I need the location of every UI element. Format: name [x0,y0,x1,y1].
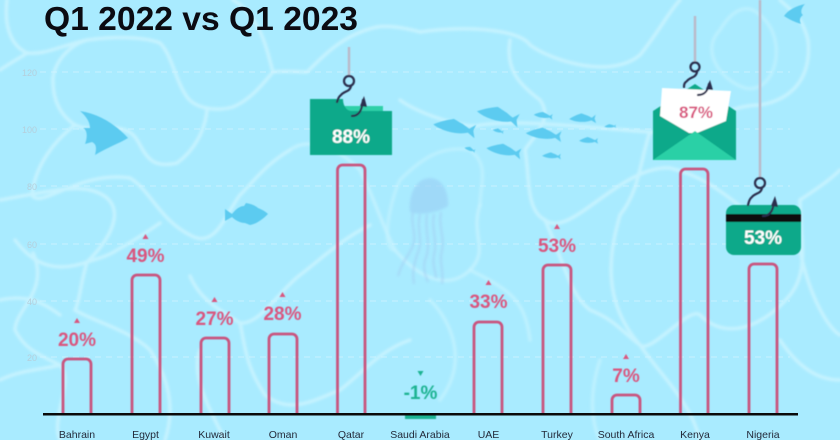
icon: small fish [225,203,268,225]
bar: Bahrain: 20% [58,330,96,351]
bar: UAE: 33% [469,292,508,313]
bar: Kuwait [195,297,234,414]
bar: South Africa [612,354,640,414]
bar: Egypt: 49% [126,246,165,267]
bar: Oman: 28% [263,304,302,325]
bar: Turkey [538,224,576,414]
country labels [59,429,780,440]
icon: envelope 87% on hook: 87% [679,103,713,122]
icon: school of fish [432,103,616,159]
chart gridlines and axis labels: 120 [22,68,37,78]
bar: Qatar [338,165,365,414]
icon: folder 88% on hook [310,47,392,155]
axis baseline [43,413,798,416]
icon: envelope 87% on hook [653,16,736,160]
bar: Bahrain [58,318,96,414]
bar: Nigeria [749,264,777,414]
chart gridlines and axis labels: 40 [27,297,37,307]
bar: Saudi Arabia [404,371,437,419]
chart gridlines and axis labels: 20 [27,353,37,363]
bar: Saudi Arabia: -1% [404,383,437,404]
bar: Kuwait: 27% [195,309,234,330]
chart gridlines and axis labels: 80 [27,182,37,192]
bar: Oman [263,292,302,414]
chart gridlines and axis labels: 100 [22,125,37,135]
bar: South Africa: 7% [612,366,640,387]
chart gridlines and axis labels: 60 [27,240,37,250]
icon: angelfish [80,111,128,155]
bar: Egypt [126,234,165,414]
bar chart [58,165,777,419]
bar: Kenya [680,169,708,414]
icon: jellyfish [398,178,448,284]
icon: top-right fish [784,4,805,24]
icon: credit card 53% on hook [726,0,801,255]
chart gridlines and axis labels [22,68,790,363]
title: Q1 2022 vs Q1 2023 [44,0,358,37]
icon: folder 88% on hook: 88% [332,127,370,148]
icon: credit card 53% on hook: 53% [744,228,782,249]
bar: Turkey: 53% [538,236,576,257]
bar: UAE [469,280,508,414]
